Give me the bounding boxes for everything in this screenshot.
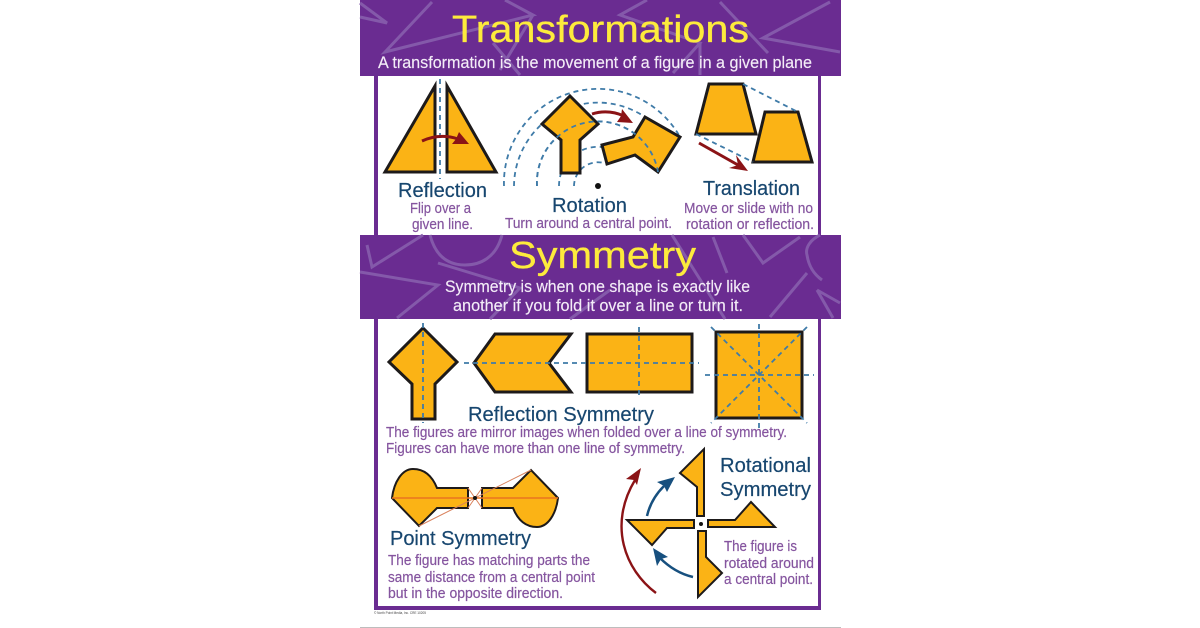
figure: bottom [698,531,722,597]
banner: transformations [360,0,841,76]
heading: point symmetry: Point Symmetry [390,528,531,550]
figure: chevron [474,334,571,392]
description: reflection symmetry [386,425,787,457]
arrow: blue lower [653,548,693,577]
description: reflection: Flip over a [410,201,472,217]
icon: center point [473,496,477,500]
dashes over figures [537,121,658,186]
description: translation: Move or slide with no [684,201,813,217]
description: reflection [410,201,473,233]
heading: rotational symmetry: Rotational [720,455,811,477]
icon: rotated figure [602,117,680,172]
description: translation: rotation or reflection. [686,217,814,233]
panel: point symmetry [388,469,595,602]
panel: translation [684,84,814,233]
description: rotational symmetry [724,539,814,588]
heading: reflection symmetry: Reflection Symmetry [468,404,654,426]
arrow: large red [622,468,656,593]
description: point symmetry: The figure has matching parts the [388,553,590,569]
heading: rotational symmetry: Symmetry [720,479,811,501]
icon: first trapezoid [696,84,756,134]
subtitle: Symmetry is when one shape is exactly like [445,277,750,296]
heading: rotational symmetry [720,455,811,501]
arrow: rotate [592,109,633,123]
icon: rotation arcs [504,89,680,186]
arrow: flip [422,132,469,144]
arrow: slide [699,143,748,171]
figure: arrow shape [389,323,457,423]
panel: reflection symmetry [386,323,814,457]
icon: center point [699,522,703,526]
heading: rotation: Rotation [552,195,627,217]
description: point symmetry: but in the opposite direction. [388,586,563,602]
copyright line: © North Point Media, Inc. CRE 10205 [374,611,426,615]
title: Symmetry [509,235,696,277]
description: rotation: Turn around a central point. [505,216,672,232]
description: rotational symmetry: a central point. [724,572,813,588]
poster frame [360,70,841,628]
description: reflection symmetry: The figures are mirror images when folded over a line of symmetry. [386,425,787,441]
icon: center point [595,183,601,189]
subtitle: another if you fold it over a line or turn it. [453,296,743,315]
symmetry lines [392,470,558,526]
description: point symmetry [388,553,595,602]
figure: left half [392,469,468,526]
icon: second trapezoid [753,112,812,162]
description: point symmetry: same distance from a central point [388,570,595,586]
slide guides [696,84,798,162]
banner: symmetry [360,235,841,319]
icon: mirrored triangles [385,79,496,179]
description: rotational symmetry: rotated around [724,556,814,572]
panel: rotation [504,89,680,232]
figure: square [705,324,814,430]
figure: top [680,449,704,516]
figure: right [708,502,775,527]
arrow: blue upper [647,477,675,516]
figure: right half [482,470,558,527]
description: reflection: given line. [412,217,473,233]
panel: rotational symmetry [622,449,814,597]
subtitle [445,277,750,315]
figure: rectangle [464,327,699,398]
description: rotational symmetry: The figure is [724,539,797,555]
panel: reflection [385,79,496,233]
figure: left [627,520,694,545]
heading: translation: Translation [703,178,800,200]
subtitle: A transformation is the movement of a figure in a given plane [378,53,812,72]
description: translation [684,201,814,233]
title: Transformations [452,9,749,51]
icon: original figure [542,96,598,173]
heading: reflection: Reflection [398,180,487,202]
description: reflection symmetry: Figures can have more than one line of symmetry. [386,441,685,457]
